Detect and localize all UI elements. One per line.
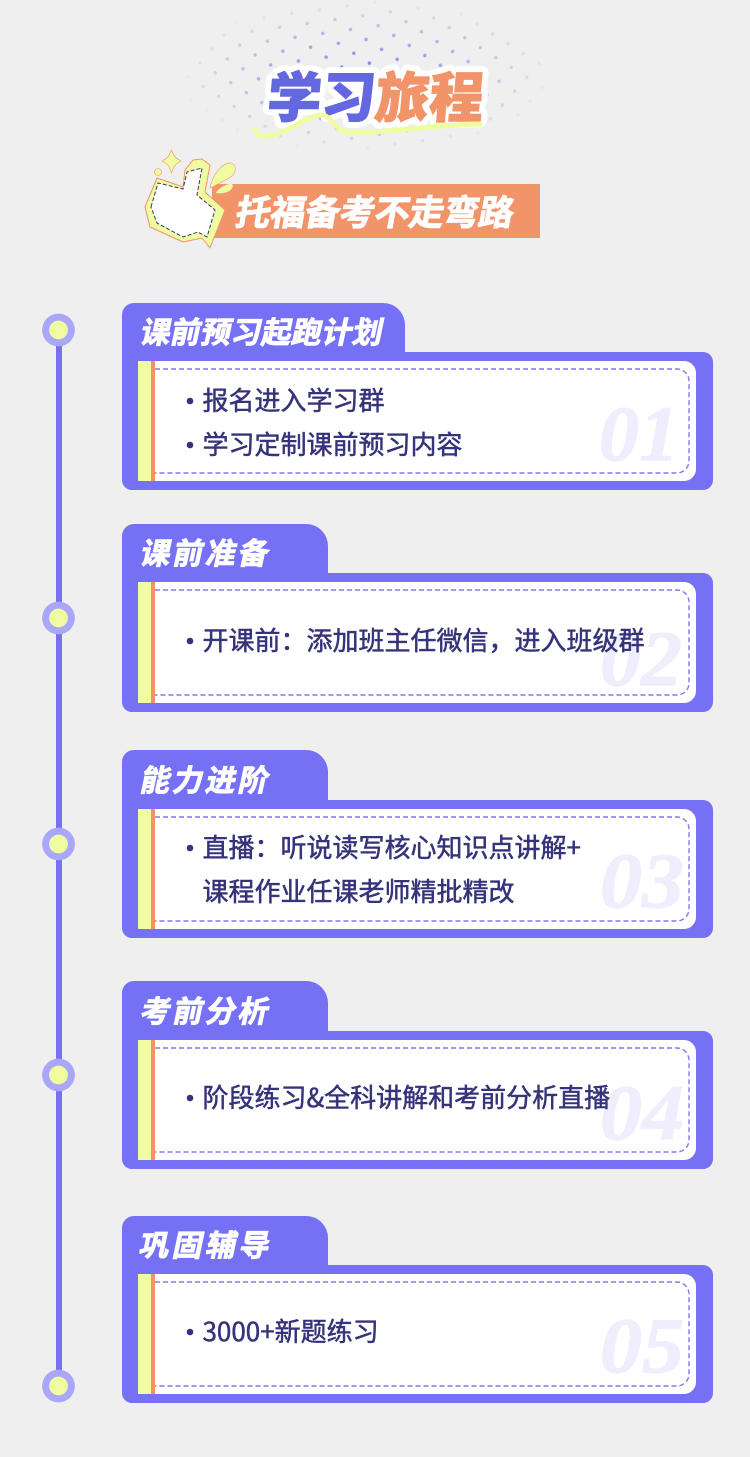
tab heading: 能力进阶 bbox=[138, 764, 273, 798]
bullet text: 学习定制课前预习内容 bbox=[202, 425, 463, 462]
watermark number 01: 01 bbox=[599, 390, 679, 477]
timeline node 2 bbox=[42, 602, 75, 634]
panel: 课前准备 bbox=[122, 524, 713, 712]
timeline node 4 bbox=[42, 1059, 75, 1091]
panel: 课前预习起跑计划 bbox=[122, 303, 713, 490]
bullet text: 直播：听说读写核心知识点讲解+ bbox=[202, 828, 581, 865]
tab heading: 巩固辅导 bbox=[137, 1229, 274, 1263]
yellow swoosh under title bbox=[255, 115, 480, 136]
timeline line bbox=[56, 330, 62, 1386]
watermark number 04: 04 bbox=[600, 1069, 684, 1156]
timeline node 5 bbox=[42, 1370, 75, 1402]
watermark number 02: 02 bbox=[600, 615, 682, 702]
icon: thumbs up with sparkles bbox=[145, 150, 235, 248]
watermark number 03: 03 bbox=[600, 837, 684, 924]
tab heading: 考前分析 bbox=[138, 995, 273, 1029]
bullet text: 阶段练习&全科讲解和考前分析直播 bbox=[202, 1078, 610, 1115]
subtitle text: 托福备考不走弯路 bbox=[233, 194, 517, 233]
subtitle banner bbox=[212, 184, 540, 238]
title: 学习旅程: 学习旅程 bbox=[265, 69, 486, 129]
timeline node 1 bbox=[42, 314, 75, 346]
dotted halftone background behind title bbox=[186, 2, 544, 150]
timeline node 3 bbox=[42, 828, 75, 860]
bullet text bbox=[187, 828, 581, 909]
bullet text: 报名进入学习群 bbox=[202, 381, 385, 418]
panel: 巩固辅导 bbox=[122, 1216, 713, 1403]
tab heading: 课前预习起跑计划 bbox=[138, 316, 387, 350]
bullet text: 3000+新题练习 bbox=[202, 1312, 379, 1349]
bullet text bbox=[187, 381, 463, 462]
panel: 能力进阶 bbox=[122, 750, 713, 938]
panel: 考前分析 bbox=[122, 981, 713, 1169]
watermark number 05: 05 bbox=[600, 1302, 684, 1389]
title: 学习旅程: 学习 bbox=[265, 69, 378, 129]
tab heading: 课前准备 bbox=[138, 537, 273, 571]
bullet text: 课程作业任课老师精批精改 bbox=[202, 872, 515, 909]
title: 学习旅程: 旅程 bbox=[373, 69, 486, 129]
bullet text: 开课前：添加班主任微信，进入班级群 bbox=[202, 621, 645, 658]
